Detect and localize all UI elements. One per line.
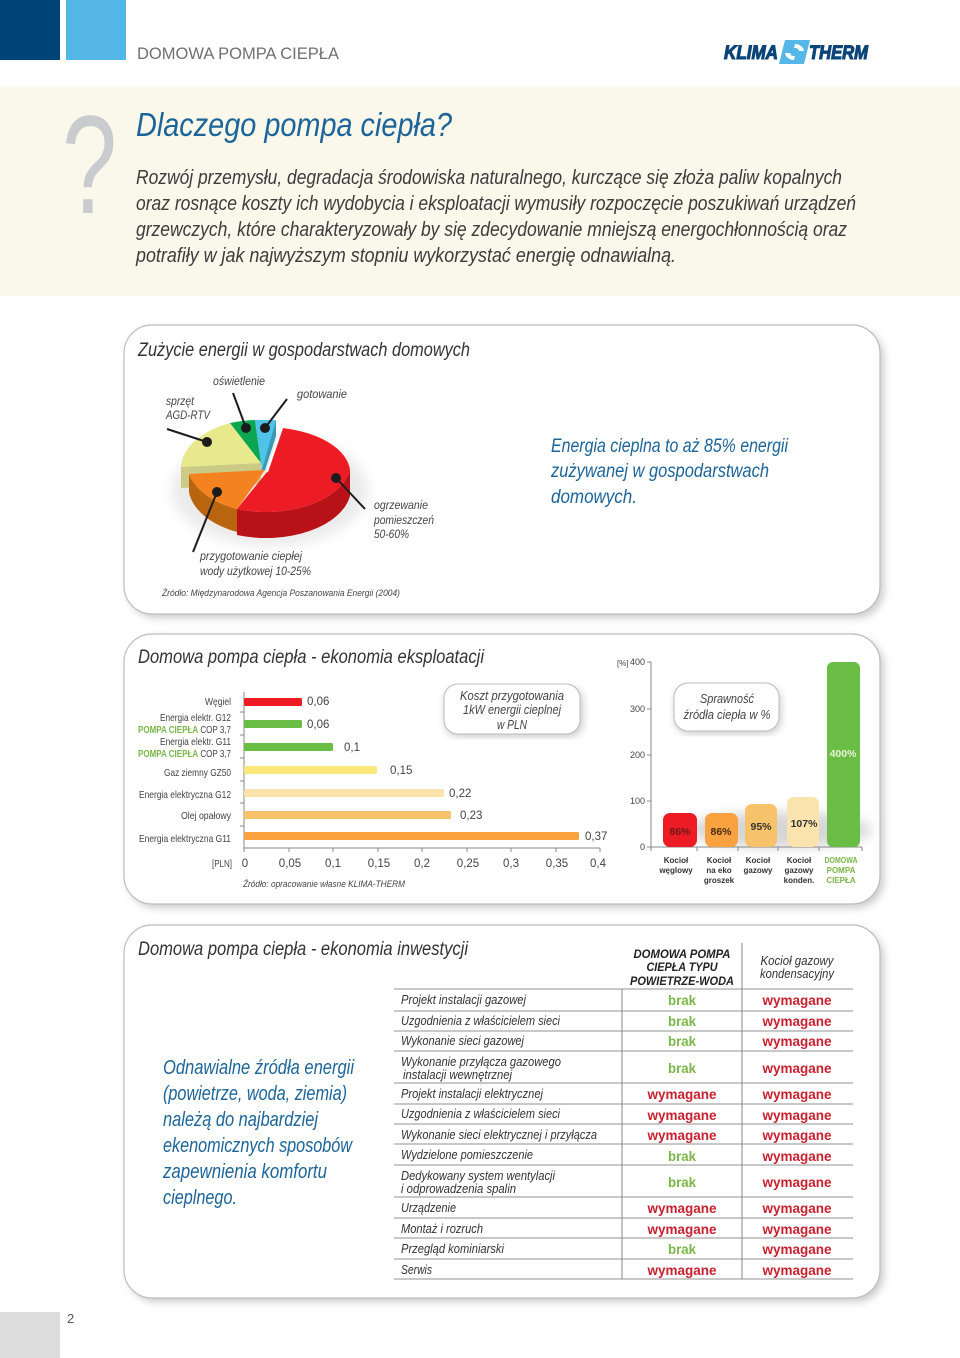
- source note: Źródło: Międzynarodowa Agencja Poszanowania Energii (2004): [161, 588, 400, 598]
- bar chart: efficiency: 86%: [669, 826, 691, 838]
- logo: Klima-Therm: THERM: [809, 43, 869, 64]
- bar chart: cost: 0,22: [449, 788, 471, 800]
- bar chart: cost: 0,2: [414, 858, 430, 870]
- comparison table: brak: [668, 1013, 696, 1029]
- logo: Klima-Therm: KLIMA: [724, 43, 778, 64]
- header squares: [0, 0, 126, 60]
- bar chart: efficiency: Kocioł: [787, 856, 812, 865]
- comparison table: Wykonanie sieci elektrycznej i przyłącza: [401, 1128, 597, 1142]
- bar chart: efficiency: węglowy: [658, 866, 693, 875]
- bar chart: efficiency: [617, 657, 872, 885]
- callout: efficiency: Sprawność: [700, 692, 755, 706]
- comparison table: Uzgodnienia z właścicielem sieci: [401, 1014, 561, 1028]
- bar chart: efficiency: 100: [630, 796, 645, 806]
- side statement: [162, 1057, 354, 1209]
- bar chart: cost: 0,37: [585, 831, 607, 843]
- main heading: Dlaczego pompa ciepła?: [136, 106, 453, 143]
- side statement: należą do najbardziej: [163, 1109, 318, 1131]
- callout: cost: 1kW energii cieplnej: [463, 703, 562, 717]
- comparison table: wymagane: [762, 1221, 832, 1237]
- callout: efficiency: [674, 683, 781, 734]
- bar chart: efficiency: Kocioł: [746, 856, 771, 865]
- comparison table: brak: [668, 1241, 696, 1257]
- intro band: [0, 87, 960, 296]
- bar chart: cost: 0,15: [390, 765, 412, 777]
- side statement: (powietrze, woda, ziemia): [163, 1083, 347, 1105]
- comparison table: wymagane: [762, 1033, 832, 1049]
- comparison table: wymagane: [762, 1060, 832, 1076]
- bar chart: cost: POMPA CIEPŁA COP 3,7: [138, 748, 231, 760]
- pie chart: [167, 393, 368, 552]
- comparison table: wymagane: [762, 1174, 832, 1190]
- source note: Źródło: opracowanie własne KLIMA-THERM: [242, 879, 405, 889]
- bar chart: cost: 0,15: [368, 858, 390, 870]
- comparison table: Projekt instalacji elektrycznej: [401, 1087, 544, 1101]
- bar chart: cost: Energia elektryczna G12: [139, 789, 231, 801]
- bar chart: efficiency: 95%: [750, 821, 772, 833]
- comparison table: wymagane: [762, 1127, 832, 1143]
- bar chart: cost: [PLN]: [212, 858, 232, 870]
- pie labels: ogrzewanie: [374, 500, 428, 512]
- callout text: zużywanej w gospodarstwach: [550, 461, 769, 482]
- comparison table: Urządzenie: [401, 1201, 456, 1215]
- bar chart: cost: 0,1: [344, 742, 360, 754]
- bar chart: cost: 0,25: [457, 858, 479, 870]
- callout: cost: [444, 684, 583, 737]
- bar chart: efficiency: 400: [630, 657, 645, 667]
- bar chart: efficiency: Kocioł: [707, 856, 732, 865]
- bar chart: efficiency: [%]: [617, 659, 629, 668]
- logo: Klima-Therm: [724, 40, 869, 64]
- comparison table: Wykonanie sieci gazowej: [401, 1034, 525, 1048]
- comparison table: wymagane: [647, 1262, 717, 1278]
- callout text: Energia cieplna to aż 85% energii: [551, 436, 789, 457]
- comparison table: brak: [668, 1148, 696, 1164]
- bar chart: cost: Gaz ziemny GZ50: [164, 767, 231, 779]
- comparison table: Przegląd kominiarski: [401, 1242, 505, 1256]
- comparison table: wymagane: [762, 1241, 832, 1257]
- bar chart: efficiency: gazowy: [785, 866, 814, 875]
- comparison table: POWIETRZE-WODA: [630, 974, 734, 988]
- pie labels: wody użytkowej 10-25%: [200, 566, 311, 578]
- bar chart: efficiency: 86%: [710, 826, 732, 838]
- bar chart: cost: POMPA CIEPŁA COP 3,7: [138, 724, 231, 736]
- bar chart: cost: 0,06: [307, 719, 329, 731]
- bar chart: cost: Energia elektryczna G11: [139, 833, 231, 845]
- panel: energy use: [124, 325, 884, 618]
- bar chart: efficiency: 0: [640, 842, 645, 852]
- bar chart: cost: 0,4: [590, 858, 607, 870]
- bar chart: efficiency: 400%: [830, 748, 857, 760]
- bar chart: cost: 0,23: [460, 810, 482, 822]
- comparison table: [394, 943, 853, 1279]
- callout: cost: Koszt przygotowania: [460, 689, 564, 703]
- comparison table: Kocioł gazowy: [760, 954, 834, 968]
- callout text: [550, 436, 789, 508]
- intro text: [135, 167, 856, 267]
- comparison table: wymagane: [762, 1148, 832, 1164]
- comparison table: Serwis: [401, 1263, 432, 1277]
- comparison table: Wykonanie przyłącza gazowego: [401, 1055, 561, 1069]
- comparison table: brak: [668, 1060, 696, 1076]
- pie labels: AGD-RTV: [165, 410, 211, 422]
- footer page tab: [0, 1312, 60, 1358]
- bar chart: efficiency: POMPA: [827, 866, 856, 875]
- panel title: Zużycie energii w gospodarstwach domowych: [137, 339, 470, 361]
- panel: investment economy: [124, 925, 884, 1302]
- bar chart: efficiency: Kocioł: [664, 856, 689, 865]
- bar chart: efficiency: konden.: [784, 876, 814, 885]
- side statement: Odnawialne źródła energii: [163, 1057, 354, 1079]
- comparison table: CIEPŁA TYPU: [646, 960, 718, 974]
- bar chart: efficiency: DOMOWA: [824, 856, 858, 865]
- comparison table: DOMOWA POMPA: [634, 947, 730, 961]
- comparison table: Dedykowany system wentylacji: [401, 1169, 556, 1183]
- bar chart: efficiency: na eko: [706, 866, 732, 875]
- panel title: Domowa pompa ciepła - ekonomia eksploatacji: [138, 646, 485, 668]
- pie labels: sprzęt: [166, 396, 195, 408]
- comparison table: wymagane: [762, 992, 832, 1008]
- question mark: ?: [62, 86, 117, 243]
- comparison table: brak: [668, 992, 696, 1008]
- panel title: Domowa pompa ciepła - ekonomia inwestycji: [138, 938, 469, 960]
- comparison table: wymagane: [762, 1013, 832, 1029]
- intro text: potrafiły w jak najwyższym stopniu wykorzystać energię odnawialną.: [135, 245, 676, 267]
- pie labels: oświetlenie: [213, 376, 265, 388]
- bar chart: efficiency: groszek: [704, 876, 735, 885]
- comparison table: Projekt instalacji gazowej: [401, 993, 527, 1007]
- bar chart: cost: Energia elektr. G12: [160, 712, 231, 724]
- comparison table: brak: [668, 1033, 696, 1049]
- bar chart: cost: Energia elektr. G11: [160, 736, 231, 748]
- side statement: cieplnego.: [163, 1187, 237, 1209]
- intro text: grzewczych, które charakteryzowały by się zdecydowanie mniejszą energochłonnością oraz: [136, 219, 847, 241]
- side statement: ekenomicznych sposobów: [163, 1135, 353, 1157]
- comparison table: Montaż i rozruch: [401, 1222, 483, 1236]
- bar chart: cost: 0,05: [279, 858, 301, 870]
- comparison table: wymagane: [762, 1200, 832, 1216]
- comparison table: wymagane: [647, 1221, 717, 1237]
- bar chart: efficiency: 300: [630, 704, 645, 714]
- pie labels: pomieszczeń: [373, 515, 434, 527]
- comparison table: wymagane: [762, 1107, 832, 1123]
- pie labels: gotowanie: [297, 389, 347, 401]
- comparison table: instalacji wewnętrznej: [403, 1068, 513, 1082]
- comparison table: wymagane: [647, 1127, 717, 1143]
- pie labels: [165, 376, 434, 578]
- comparison table: i odprowadzenia spalin: [401, 1182, 516, 1196]
- comparison table: wymagane: [762, 1262, 832, 1278]
- bar chart: cost: 0,3: [503, 858, 519, 870]
- intro text: oraz rosnące koszty ich wydobycia i eksploatacji wymusiły rozpoczęcie poszukiwań urządzeń: [136, 193, 856, 215]
- comparison table: wymagane: [647, 1086, 717, 1102]
- comparison table: kondensacyjny: [760, 967, 835, 981]
- pie labels: przygotowanie ciepłej: [199, 551, 302, 563]
- comparison table: wymagane: [647, 1107, 717, 1123]
- comparison table: Uzgodnienia z właścicielem sieci: [401, 1107, 561, 1121]
- comparison table: wymagane: [762, 1086, 832, 1102]
- callout: efficiency: źródła ciepła w %: [683, 708, 770, 722]
- header label: DOMOWA POMPA CIEPŁA: [137, 45, 339, 63]
- bar chart: efficiency: CIEPŁA: [826, 876, 856, 885]
- bar chart: cost: 0,06: [307, 696, 329, 708]
- pie labels: 50-60%: [374, 529, 409, 541]
- comparison table: wymagane: [647, 1200, 717, 1216]
- bar chart: efficiency: gazowy: [744, 866, 773, 875]
- callout: cost: w PLN: [497, 718, 528, 732]
- bar chart: cost: Węgiel: [205, 696, 231, 708]
- page number: 2: [67, 1311, 74, 1326]
- bar chart: cost: Olej opałowy: [181, 810, 232, 822]
- panel: operating economy: [124, 634, 884, 908]
- comparison table: Wydzielone pomieszczenie: [401, 1148, 533, 1162]
- intro text: Rozwój przemysłu, degradacja środowiska naturalnego, kurczące się złoża paliw kopalnych: [136, 167, 842, 189]
- bar chart: cost: [138, 692, 607, 870]
- comparison table: brak: [668, 1174, 696, 1190]
- callout text: domowych.: [551, 487, 637, 508]
- bar chart: cost: 0,35: [546, 858, 568, 870]
- bar chart: efficiency: 200: [630, 750, 645, 760]
- bar chart: cost: 0: [242, 858, 248, 870]
- bar chart: cost: 0,1: [325, 858, 341, 870]
- bar chart: efficiency: 107%: [791, 818, 818, 830]
- side statement: zapewnienia komfortu: [162, 1161, 327, 1183]
